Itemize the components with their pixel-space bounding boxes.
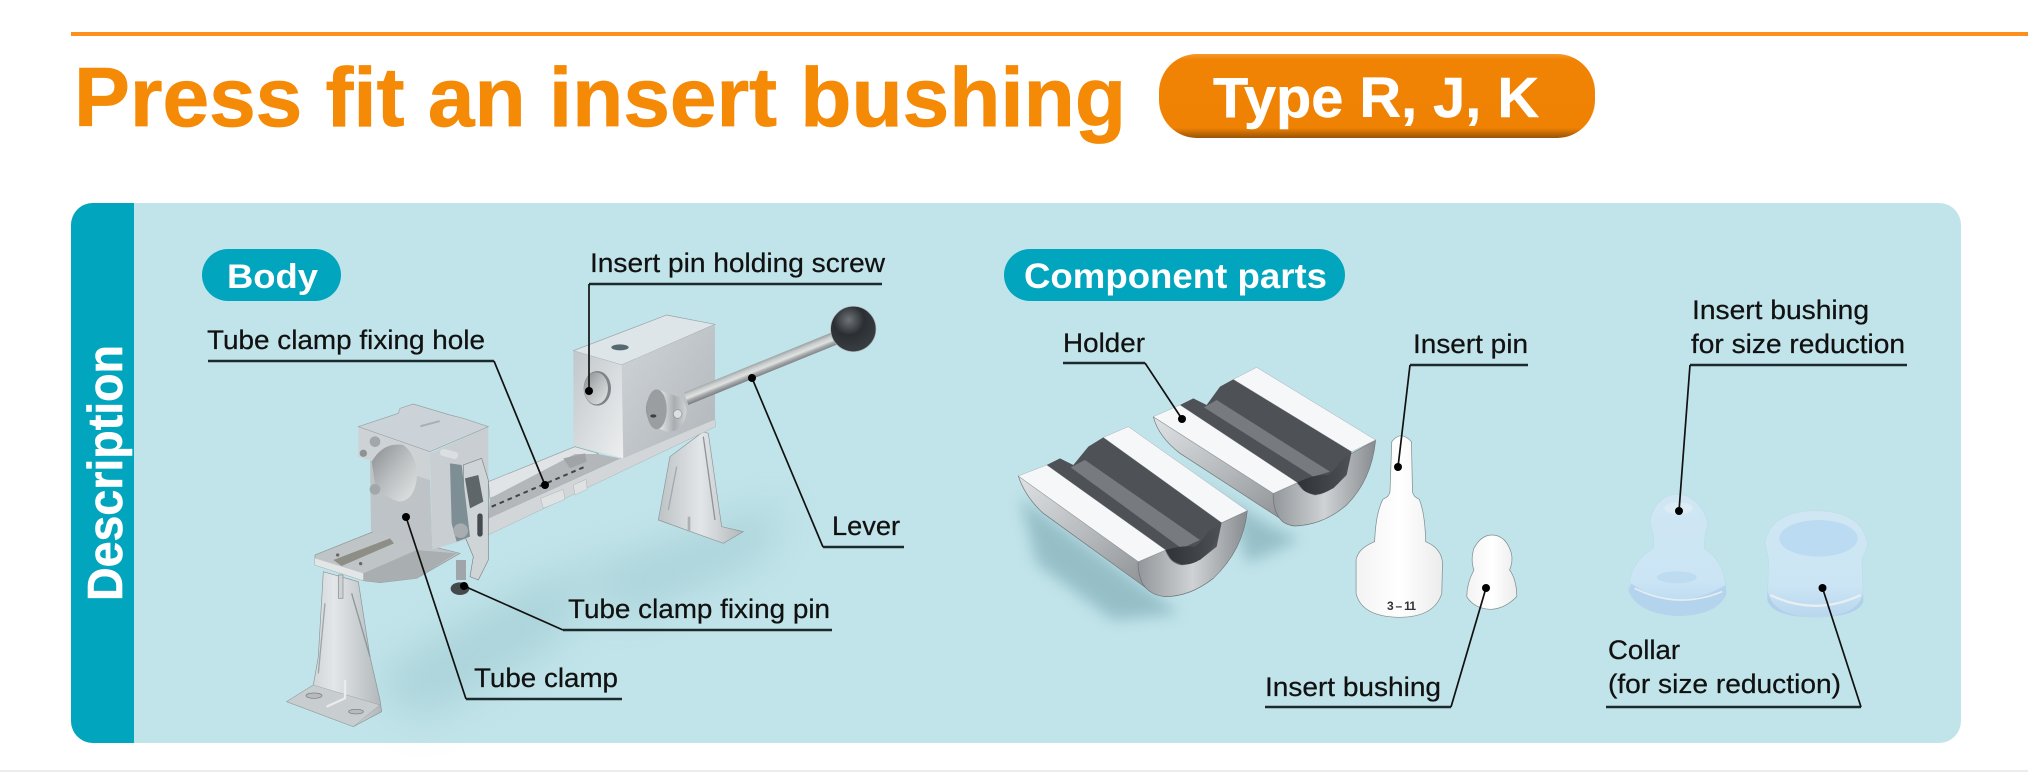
type badge: [1159, 54, 1595, 138]
label: Insert pin: [1394, 329, 1528, 471]
clamp latch: [450, 458, 488, 595]
press block: [573, 315, 715, 458]
rail beam: [488, 419, 716, 535]
label: Tube clamp: [402, 513, 622, 699]
label: Insert bushing: [1265, 584, 1490, 707]
label: Tube clamp: Tube clamp: [474, 663, 618, 693]
heading: Component parts: Component parts: [1024, 256, 1327, 296]
front leg: [287, 572, 382, 727]
holder shadows: [1020, 463, 1300, 620]
label: Tube clamp fixing hole: Tube clamp fixing hole: [207, 325, 485, 355]
bottom edge line: [0, 770, 2028, 772]
type badge: Type R, J, K: [1213, 66, 1539, 130]
label: Insert bushing for size reduction: for size reduction: [1691, 329, 1905, 359]
label: Insert bushing: Insert bushing: [1265, 672, 1441, 702]
rail base: [315, 532, 460, 583]
label: Collar (for size reduction): Collar: [1608, 635, 1680, 665]
illustration: body assembly: [287, 306, 876, 727]
illustration: insert pin: 3 – 11: [1387, 599, 1416, 613]
label: Holder: [1063, 328, 1186, 423]
label: Lever: Lever: [832, 511, 900, 541]
label: Holder: Holder: [1063, 328, 1145, 358]
floor shadows: [370, 500, 790, 720]
sidebar: Description: Description: [79, 345, 133, 601]
lever with knob: [646, 306, 876, 432]
fixing pin tip: [451, 582, 469, 595]
tube clamp: [358, 404, 488, 549]
sidebar: Description: [71, 203, 134, 743]
illustration: holders: [1018, 367, 1376, 620]
front holder: [1018, 427, 1247, 597]
label: Insert bushing for size reduction: Insert bushing: [1692, 295, 1869, 325]
illustration: insert bushing: [1467, 535, 1517, 609]
label: Tube clamp fixing hole: [207, 325, 549, 489]
illustration: blue insert bushing for size reduction: [1629, 494, 1726, 616]
label: Insert pin: Insert pin: [1413, 329, 1528, 359]
panel: description background: [71, 203, 1961, 743]
label: Insert pin holding screw: [585, 248, 886, 395]
heading: Component parts: [1004, 249, 1345, 301]
label: Lever: [748, 374, 904, 547]
label: Insert bushing for size reduction: [1675, 295, 1907, 515]
heading: Body: [202, 249, 341, 301]
label: Tube clamp fixing pin: [460, 582, 832, 630]
illustration: insert pin: [1356, 436, 1442, 617]
back holder: [1153, 367, 1376, 526]
label: Collar (for size reduction): (for size reduction): [1608, 669, 1841, 699]
heading: Body: Body: [227, 258, 318, 296]
label: Collar (for size reduction): [1606, 584, 1861, 707]
illustration: blue collar for size reduction: [1765, 511, 1868, 617]
top orange rule: [71, 32, 2028, 36]
label: Insert pin holding screw: Insert pin holding screw: [590, 248, 886, 278]
label: Tube clamp fixing pin: Tube clamp fixing pin: [568, 594, 830, 624]
rear leg: [658, 432, 743, 543]
title: Press fit an insert bushing: [74, 50, 1126, 144]
